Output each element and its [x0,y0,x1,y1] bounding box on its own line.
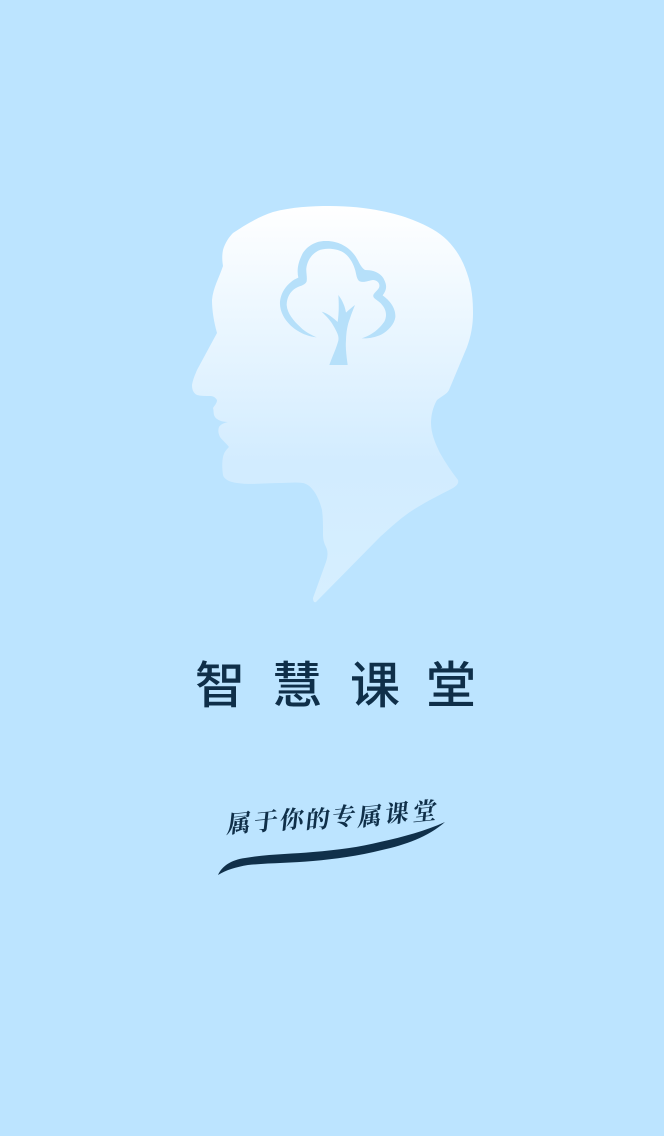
slogan: 堂 [411,791,439,828]
title: 课 [350,646,400,718]
title: 堂 [426,646,476,718]
slogan: 的 [304,799,332,836]
icon: head silhouette with tree [192,206,473,602]
head silhouette [192,206,473,602]
title [195,646,476,718]
title: 智 [195,646,245,718]
icon: tree trunk [322,295,355,365]
title: 慧 [272,646,322,718]
icon: tree crown outline [280,241,395,338]
slogan: 专 [330,796,358,833]
slogan: 属 [356,796,384,833]
slogan: 属 [225,803,253,840]
slogan: 于 [252,801,280,838]
slogan [225,791,439,840]
slogan: 你 [278,798,308,836]
brush stroke underline [218,822,445,875]
slogan: 课 [383,793,411,830]
